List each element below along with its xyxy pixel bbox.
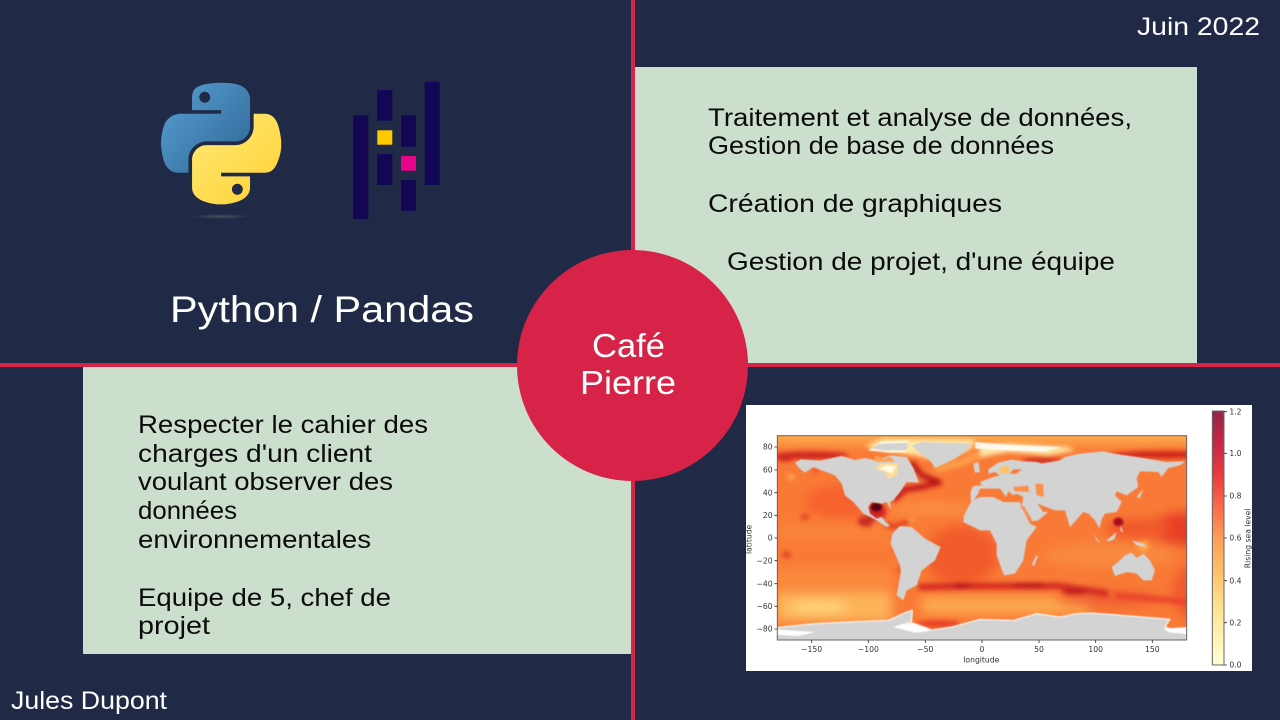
axis labels: 60 [763, 466, 773, 475]
colorbar: 1.2 [1229, 407, 1242, 416]
colorbar: Rising sea level [1243, 508, 1252, 568]
panel: project description [83, 367, 631, 654]
text block: project description [138, 411, 428, 640]
axis labels: −50 [917, 645, 934, 654]
colorbar: 0.8 [1229, 492, 1242, 501]
axis labels: −150 [801, 645, 822, 654]
arctic ice [865, 439, 1075, 462]
map frame [777, 436, 1187, 640]
map plot [778, 436, 1186, 640]
text block: skills: Gestion de projet, d'une équipe [727, 248, 1115, 276]
axis labels: 50 [1034, 645, 1044, 654]
text block: project description: charges d'un client [138, 440, 372, 468]
panel: skills [635, 67, 1197, 363]
axis labels: −60 [756, 602, 773, 611]
axis labels: −100 [858, 645, 879, 654]
axis labels: 80 [763, 443, 773, 452]
author name: Jules Dupont [11, 687, 167, 715]
icon: python logo [161, 83, 281, 219]
center circle: Pierre [580, 364, 676, 401]
axis labels: 0 [768, 534, 773, 543]
colorbar: 1.0 [1229, 449, 1242, 458]
icon: pandas logo [353, 82, 440, 219]
axis labels: −20 [756, 556, 773, 565]
ocean gradients [778, 436, 1186, 626]
text block: project description: Equipe de 5, chef de [138, 584, 391, 612]
axis labels: 150 [1145, 645, 1160, 654]
colorbar: 0.4 [1229, 576, 1242, 585]
antarctica [778, 609, 1186, 640]
colorbar: 0.6 [1229, 534, 1242, 543]
text block: project description: projet [138, 612, 210, 640]
axis labels: 40 [763, 488, 773, 497]
colorbar [1212, 407, 1252, 670]
text block: skills: Traitement et analyse de données, [708, 104, 1132, 132]
text block: skills: Création de graphiques [708, 190, 1002, 218]
text block: project description: données [138, 497, 237, 525]
chart: rising sea level world map [745, 405, 1252, 671]
sea level hot spots [871, 503, 1123, 526]
text block: project description: Respecter le cahier des [138, 411, 428, 439]
colorbar: 0.2 [1229, 618, 1242, 627]
axis ticks [774, 447, 1152, 643]
text block: project description: environnementales [138, 526, 371, 554]
colorbar: 0.0 [1229, 661, 1242, 670]
text block: skills: Gestion de base de données [708, 132, 1054, 160]
axis labels: −80 [756, 625, 773, 634]
heading: Python / Pandas: Python / Pandas [170, 289, 474, 330]
text block: project description: voulant observer des [138, 468, 393, 496]
axis labels: longitude [963, 656, 1000, 665]
date: Juin 2022 [1137, 13, 1260, 41]
vertical divider [631, 0, 635, 720]
center circle [517, 250, 748, 481]
horizontal divider [0, 363, 1280, 367]
center circle: Café [592, 327, 665, 364]
axis labels: 100 [1088, 645, 1103, 654]
axis labels: −40 [756, 579, 773, 588]
axis labels [745, 443, 1160, 665]
axis labels: 0 [980, 645, 985, 654]
axis labels: 20 [763, 511, 773, 520]
text block: skills [708, 104, 1132, 276]
axis labels: latitude [745, 524, 754, 554]
continents [795, 455, 919, 527]
